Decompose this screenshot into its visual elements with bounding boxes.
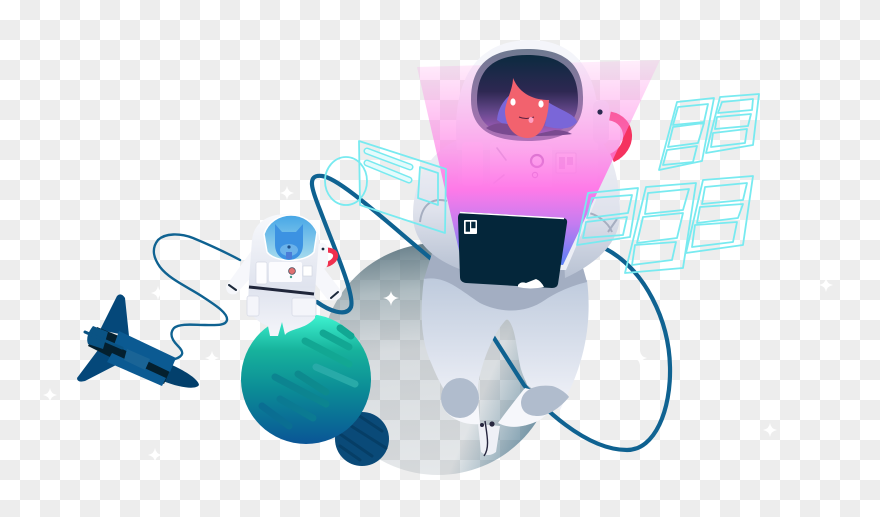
dark fuselage: [88, 327, 175, 384]
lower wing: [77, 342, 118, 382]
knob: [593, 100, 609, 144]
top bar: [114, 331, 176, 372]
visor ring: [471, 49, 583, 141]
fingers: [518, 279, 544, 288]
right shoulder: [560, 135, 620, 278]
collar: [486, 123, 572, 136]
tablet: [458, 212, 567, 288]
cockpit panel: [124, 349, 150, 370]
torso: [458, 130, 600, 270]
panel: lower 2: [625, 183, 696, 273]
helmet: [456, 40, 599, 150]
knob: [316, 243, 328, 269]
logo: [464, 220, 477, 234]
nose: [160, 362, 199, 388]
body shade: [424, 250, 587, 311]
pink light beam: [417, 60, 660, 265]
belt: [249, 287, 314, 294]
sparkle on planet: [383, 291, 399, 306]
dog head: [275, 224, 303, 260]
right foot: [498, 388, 566, 427]
panel: left card: [325, 141, 446, 233]
elbow arcs: [420, 200, 617, 232]
space shuttle: [77, 294, 199, 388]
small dark planet: [335, 412, 389, 466]
knob dot: [597, 109, 603, 115]
large tether: [312, 176, 670, 450]
legs: [422, 278, 589, 420]
suit body: [248, 214, 319, 336]
visor: [477, 55, 578, 136]
panel: top right 1: [659, 98, 714, 170]
small astronaut: [226, 214, 342, 336]
big translucent planet: [321, 243, 555, 475]
leg pads: [247, 296, 259, 316]
panel: lower 1: [577, 188, 638, 245]
small tether: [154, 234, 240, 359]
arms: [226, 250, 256, 294]
teal planet: [241, 314, 371, 444]
left shoulder: [413, 138, 480, 270]
sparkles: [43, 186, 833, 462]
main astronaut: [413, 40, 660, 456]
red hose: [610, 116, 628, 158]
chest pads: [256, 262, 267, 284]
lower strap: [478, 424, 500, 455]
panel: lower 3: [686, 176, 753, 253]
chest pads: [462, 142, 483, 186]
red hose: [325, 250, 336, 265]
left foot: [446, 388, 480, 424]
panel: top right 2: [706, 94, 759, 153]
tail fin: [100, 294, 129, 336]
helmet glass: [264, 215, 317, 260]
engine block: [87, 326, 108, 349]
hood: [497, 94, 577, 130]
bottom bar: [107, 353, 166, 386]
face: [505, 78, 549, 138]
holographic panels: [325, 94, 759, 273]
